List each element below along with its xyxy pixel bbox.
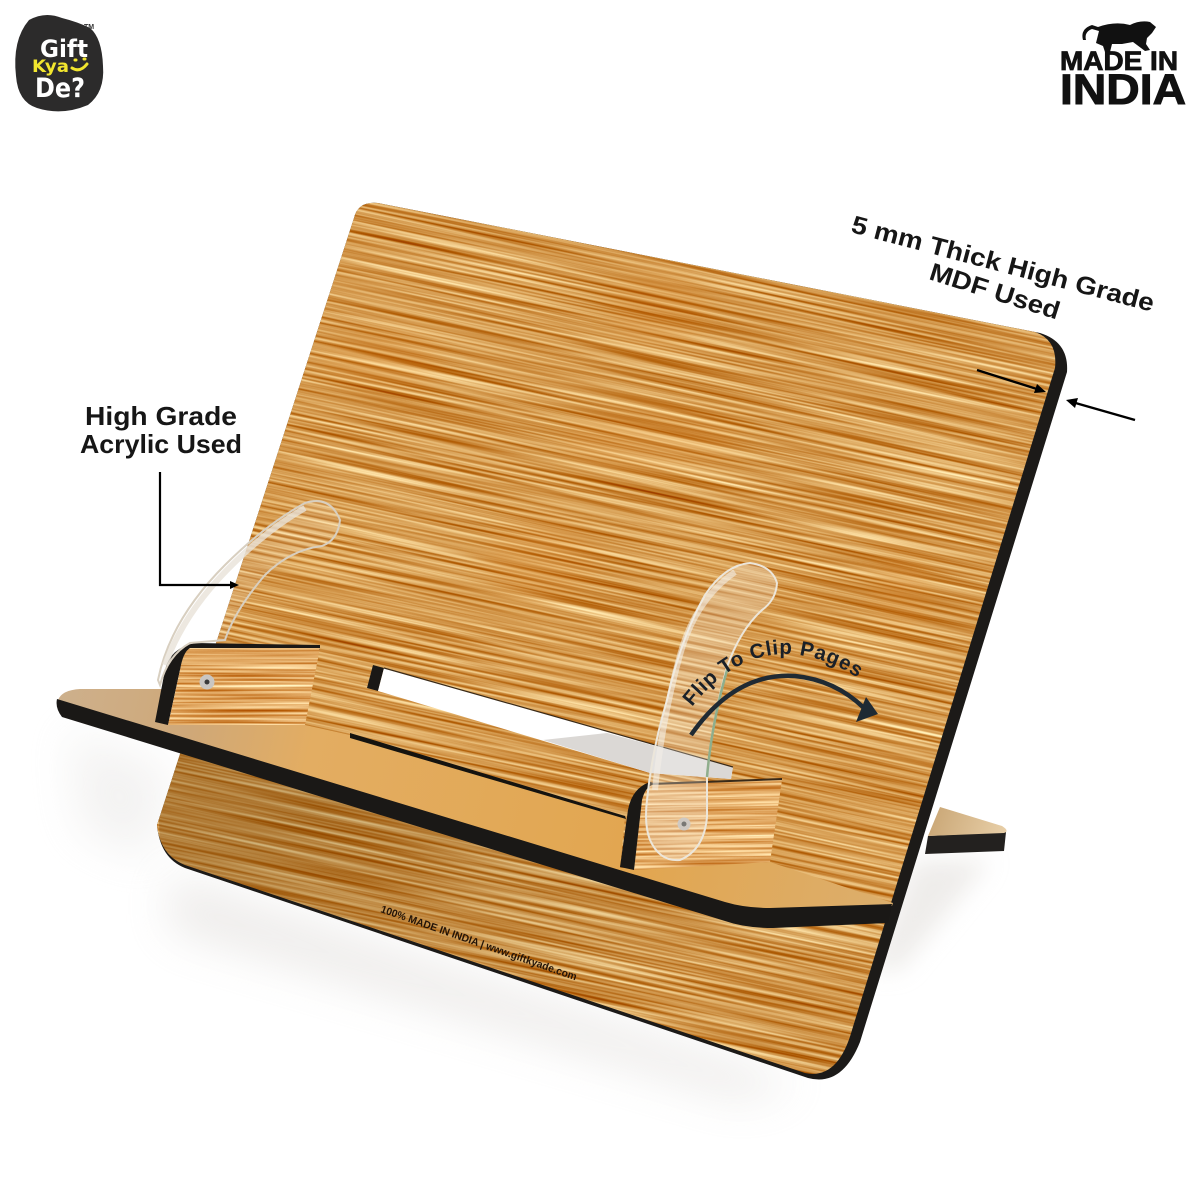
left block xyxy=(155,643,320,725)
leader arrow xyxy=(160,472,239,589)
left acrylic clip xyxy=(158,501,340,685)
left block wood face xyxy=(168,648,320,725)
back board edge xyxy=(157,203,1067,1079)
shelf slit xyxy=(350,733,626,819)
left block black rounded side xyxy=(155,643,320,725)
shelf top surface xyxy=(58,689,893,910)
right block wood face xyxy=(634,780,782,870)
callout text xyxy=(80,401,242,459)
callout: MDF thickness xyxy=(848,211,1157,420)
shelf front edge xyxy=(57,699,892,928)
curved label xyxy=(692,654,868,707)
book slot xyxy=(367,665,733,779)
left acrylic glint band xyxy=(165,508,305,665)
wood blotches xyxy=(320,274,930,630)
left block screw xyxy=(200,674,214,690)
right block top line xyxy=(650,778,782,786)
logo word De: De? xyxy=(35,73,85,104)
icon: lion xyxy=(1082,21,1156,52)
right acrylic sheet xyxy=(646,563,777,860)
right acrylic outer highlight xyxy=(655,572,735,790)
badge: Made in India xyxy=(1060,21,1186,114)
logo blob xyxy=(15,15,103,111)
imprint text: 100% MADE IN INDIA | www.giftkyade.com xyxy=(379,904,578,983)
logo smile xyxy=(72,59,87,70)
callout text: 5 mm Thick High Grade xyxy=(848,211,1157,318)
logo trademark: TM xyxy=(84,24,94,31)
arrow to inner edge xyxy=(977,370,1046,393)
left acrylic sheet xyxy=(158,501,340,685)
callout: flip to clip pages xyxy=(682,640,878,736)
logo: Gift Kya De xyxy=(15,15,103,111)
right acrylic clip xyxy=(646,563,777,860)
logo word Kya: Kya xyxy=(32,57,69,77)
lower board shading xyxy=(159,754,746,988)
arrow to outer edge xyxy=(1066,398,1135,420)
callout: acrylic xyxy=(80,401,242,589)
badge text INDIA: INDIA xyxy=(1060,66,1186,114)
right block screw xyxy=(678,818,690,830)
back board wood face xyxy=(157,202,1056,1074)
right acrylic edge glint xyxy=(707,667,728,777)
callout text: High Grade xyxy=(85,401,237,431)
right block black rounded side xyxy=(620,782,660,870)
callout text: MDF Used xyxy=(926,258,1063,325)
curved arrow xyxy=(691,676,878,735)
right block xyxy=(620,778,782,870)
callout: flip to clip pages: Flip To Clip Pages xyxy=(682,640,862,706)
floor shadow xyxy=(70,730,990,1100)
callout text: Acrylic Used xyxy=(80,429,242,459)
badge text MADE IN: MADE IN xyxy=(1060,46,1178,76)
rear foot of the stand xyxy=(925,807,1007,854)
logo word Gift: Gift xyxy=(40,35,88,63)
